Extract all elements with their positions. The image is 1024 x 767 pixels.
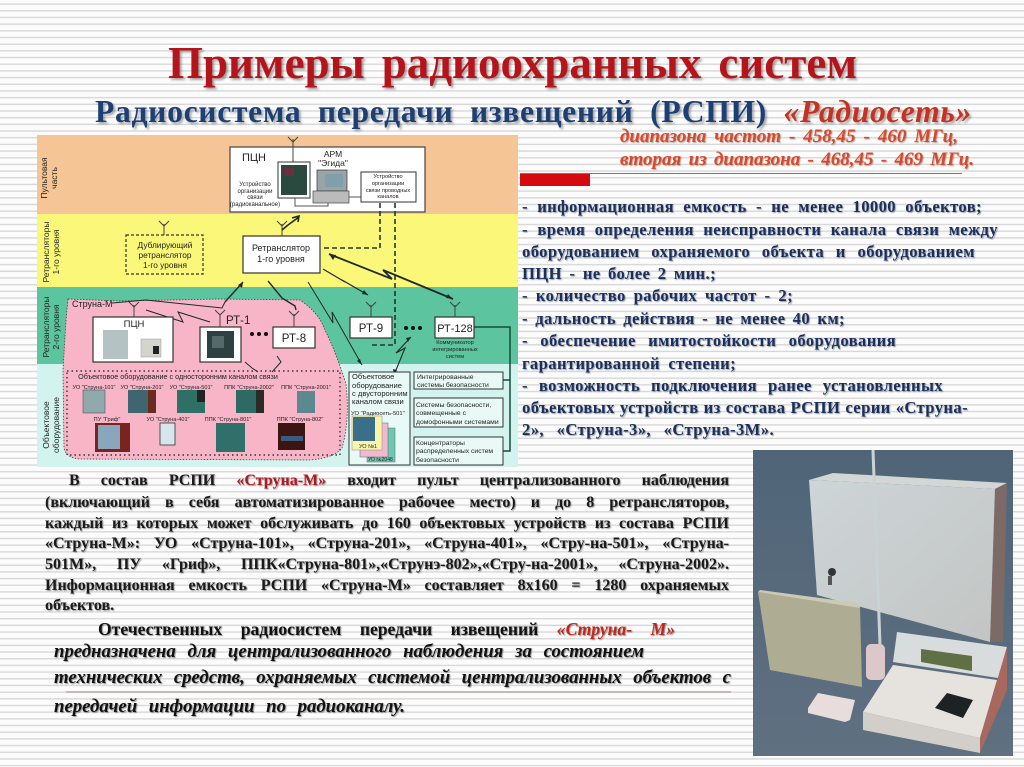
backup repeater: ретранслятор <box>139 250 192 260</box>
paragraph: Струна-М composition: Информационная емкость РСПИ «Струна-М» составляет 8х160 = 1280 охраняемых <box>45 577 729 594</box>
one-way object equipment: УО "Струна-201" <box>120 385 164 391</box>
paragraph: Струна-М composition: 501М», ПУ «Гриф», ППК«Струна-801»,«Струнэ-802»,«Стру-на-2001», «Струна-2002». <box>45 556 729 573</box>
РТ-1: РТ-1 <box>226 315 250 327</box>
band: console part: Пультовая <box>39 157 49 199</box>
level 1 repeater: 1-го уровня <box>257 254 305 264</box>
frequency ranges text: диапазона частот - 458,45 - 460 МГц, <box>620 126 958 147</box>
ellipsis dots <box>250 332 268 336</box>
ПЦН console block: Устройство <box>239 181 271 188</box>
РТ-128: интегрированных <box>432 347 478 353</box>
one-way object equipment: УО "Струна-401" <box>146 417 190 423</box>
two-way object equipment: оборудование <box>352 381 402 390</box>
band: console part: часть <box>49 167 59 189</box>
band: object equipment: оборудование <box>51 397 61 453</box>
ПЦН Струна-М: ПЦН <box>124 319 144 330</box>
one-way object equipment: ППК "Струна-801" <box>205 417 251 423</box>
paragraph: Струна-М composition: В состав РСПИ «Струна-М» входит пульт централизованного наблюдения <box>69 472 729 489</box>
system diagram <box>37 135 518 467</box>
band: level 2 repeaters: Ретрансляторы <box>41 297 51 357</box>
specifications list: гарантированной степени; <box>522 354 736 373</box>
wall cabinet <box>809 473 1007 642</box>
intercom security systems: домофонными системами <box>416 419 499 426</box>
frequency ranges text: вторая из диапазона - 468,45 - 469 МГц. <box>620 149 974 170</box>
paragraph: Струна-М composition: (включающий в себя автоматизированное рабочее место) и до 8 ретрансляторов, <box>45 494 729 511</box>
distributed system concentrators: распределенных систем <box>416 448 493 455</box>
РТ-128: Коммуникатор <box>436 340 474 346</box>
pink zone: Струна-М <box>63 299 347 460</box>
intercom security systems: совмещенные с <box>416 410 467 417</box>
wired dashed lines <box>322 203 395 345</box>
specifications list: - количество рабочих частот - 2; <box>522 286 793 305</box>
paragraph: purpose of Струна-М: передачей информации по радиоканалу. <box>54 696 405 717</box>
specifications list: - дальность действия - не менее 40 км; <box>522 309 845 328</box>
ПЦН console block: АРМ <box>324 149 342 159</box>
РТ-8 <box>273 311 315 348</box>
specifications list: 2», «Струна-3», «Струна-3М». <box>522 420 774 439</box>
ПЦН console block: организации <box>238 189 272 195</box>
two-way object equipment <box>349 372 410 465</box>
specifications list: - обеспечение имитостойкости оборудования <box>522 331 896 350</box>
two-way object equipment: каналом связи <box>352 397 404 406</box>
band: level 2 repeaters <box>37 287 518 364</box>
two-way object equipment: Объектовое <box>352 372 394 381</box>
band: level 1 repeaters: Ретрансляторы <box>41 222 51 282</box>
paragraph: purpose of Струна-М: Отечественных радиосистем передачи извещений «Струна- М» <box>98 619 675 639</box>
paragraph: Струна-М composition: «Струна-М»: УО «Струна-101», «Струна-201», «Струна-401», «Стру-на-501», «Струна- <box>45 535 729 552</box>
ПЦН console block: Устройство <box>373 173 403 180</box>
ПЦН Струна-М <box>93 302 173 362</box>
backup repeater: Дублирующий <box>138 240 193 250</box>
РТ-128 <box>432 302 478 360</box>
antenna <box>873 450 880 645</box>
one-way object equipment: ППК "Струна-2002" <box>224 385 274 391</box>
two-way object equipment: с двусторонним <box>352 389 408 398</box>
level 1 repeater: Ретранслятор <box>252 243 310 253</box>
ПЦН console block: связи <box>247 195 263 201</box>
one-way object equipment: ППК "Струна-802" <box>277 417 323 423</box>
photo: radio system equipment <box>753 450 1013 756</box>
integrated security systems: Интегрированные <box>417 374 474 381</box>
specifications list: ПЦН - не более 2 мин.; <box>522 264 716 283</box>
paragraph: purpose of Струна-М: предназначена для централизованного наблюдения за состоянием <box>54 641 644 662</box>
band: object equipment: Объектовое <box>41 401 51 449</box>
connector to integrated systems <box>474 327 510 451</box>
subtitle: Радиосистема передачи извещений (РСПИ) «Радиосеть» <box>95 94 972 129</box>
one-way object equipment <box>67 371 340 455</box>
red divider accent <box>520 173 962 186</box>
ПЦН console block: (радиоканальное) <box>230 202 280 208</box>
console unit <box>863 632 1007 753</box>
paragraph: purpose of Струна-М: технических средств, охраняемых системой централизованных объектов с <box>54 667 731 688</box>
transceiver box <box>758 590 862 687</box>
two-way object equipment: УО №1 <box>359 444 377 450</box>
РТ-128: РТ-128 <box>437 323 473 335</box>
ПЦН console block: каналов <box>377 194 399 200</box>
backup repeater: 1-го уровня <box>143 260 187 270</box>
one-way object equipment: Объектовое оборудование с односторонним каналом связи <box>78 372 278 381</box>
distributed system concentrators: безопасности <box>416 456 459 464</box>
distributed system concentrators: Концентраторы <box>416 440 465 447</box>
band: level 1 repeaters <box>37 214 518 287</box>
specifications list: - время определения неисправности канала связи между <box>522 220 998 239</box>
integrated security systems <box>414 372 503 389</box>
paragraph: purpose of Струна-М <box>54 619 732 718</box>
specifications list: - возможность подключения ранее установленных <box>522 376 943 395</box>
one-way object equipment: ППК "Струна-2001" <box>281 385 331 391</box>
title: Примеры радиоохранных систем <box>168 38 857 88</box>
paragraph: Струна-М composition <box>45 472 730 614</box>
specifications list: - информационная емкость - не менее 10000 объектов; <box>522 197 982 216</box>
two-way object equipment: УО "Радиосеть-501" <box>351 411 405 417</box>
pink zone: Струна-М: Струна-М <box>72 299 112 309</box>
band: object equipment <box>37 364 518 467</box>
band: level 1 repeaters: 1-го уровня <box>51 229 61 274</box>
integrated security systems: системы безопасности <box>417 381 489 389</box>
level 1 repeater <box>243 221 320 273</box>
radio link arrows <box>112 216 453 375</box>
band: level 2 repeaters: 2-го уровня <box>51 304 61 349</box>
РТ-8: РТ-8 <box>282 333 306 345</box>
specifications list <box>522 197 999 440</box>
РТ-9 <box>350 302 392 338</box>
ПЦН console block <box>230 137 425 212</box>
ПЦН console block: связи проводных <box>366 188 410 194</box>
РТ-128: систем <box>446 354 464 360</box>
ПЦН console block: "Эгида" <box>318 158 348 168</box>
backup repeater <box>126 221 203 274</box>
small key fob device <box>808 693 855 722</box>
distributed system concentrators <box>414 437 503 465</box>
ellipsis dots <box>404 326 422 330</box>
intercom security systems: Системы безопасности, <box>416 401 491 409</box>
specifications list: объектовых устройств из состава РСПИ серии «Струна- <box>522 398 968 417</box>
paragraph: Струна-М composition: каждый из которых может обслуживать до 160 объектовых устройств из состава РСПИ <box>45 515 729 532</box>
band: console part <box>37 135 518 214</box>
one-way object equipment: УО "Струна-501" <box>169 385 213 391</box>
paragraph: Струна-М composition: объектов. <box>45 597 114 614</box>
intercom security systems <box>414 398 503 427</box>
connector <box>866 644 885 680</box>
ПЦН console block: организации <box>372 181 404 187</box>
РТ-9: РТ-9 <box>359 323 383 335</box>
one-way object equipment: УО "Струна-101" <box>72 385 116 391</box>
specifications list: оборудованием охраняемого объекта и оборудованием <box>522 242 975 261</box>
two-way object equipment: УО №2048 <box>368 457 393 463</box>
one-way object equipment: ПУ "Гриф" <box>94 417 120 423</box>
ПЦН console block: ПЦН <box>242 152 266 164</box>
frequency ranges text <box>620 126 974 170</box>
РТ-1 <box>200 310 250 362</box>
